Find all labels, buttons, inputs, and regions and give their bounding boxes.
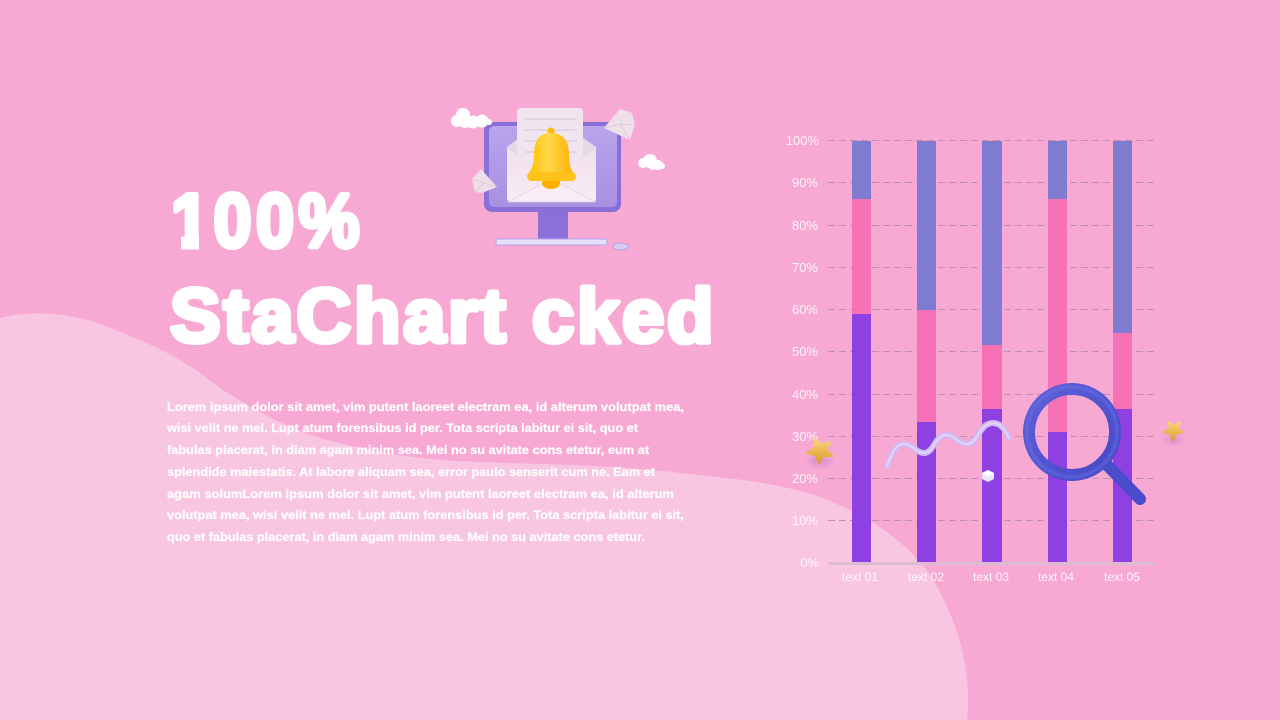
body paragraph: volutpat mea, wisi velit ne mel. Lupt atum forensibus id per. Tota scripta labitur ei sit, [167,508,684,522]
envelope back [507,115,596,182]
icon: monitor with envelope and bell [451,108,665,250]
small envelope right [604,109,635,140]
body paragraph: agam solumLorem ipsum dolor sit amet, vim putent laoreet electram ea, id alterum [167,487,674,501]
title [170,180,716,359]
bell [527,128,576,189]
y axis labels: 40% [792,387,818,402]
body paragraph: splendide maiestatis. At labore aliquam sea, error paulo senserit cum ne. Eam et [167,465,655,479]
y axis labels: 70% [792,260,818,275]
bar: text 03 [982,141,1002,563]
decorative light pink blob [0,313,968,720]
body paragraph: fabulas placerat, in diam agam minim sea. Mei no su avitate cons etetur, eum at [167,443,649,457]
icon: small cube [982,470,994,482]
bar: text 02 [917,141,936,563]
keyboard [496,239,607,245]
x axis labels: text 05 [1104,570,1140,584]
title: 100% [171,180,364,264]
y axis labels: 90% [792,175,818,190]
y axis labels: 80% [792,218,818,233]
mouse [613,243,628,250]
monitor stand [538,210,568,240]
icon: star right [1163,422,1183,444]
y axis labels: 20% [792,471,818,486]
envelope pocket [507,147,596,202]
x axis labels: text 04 [1038,570,1074,584]
cloud right [638,154,665,170]
body paragraph: Lorem ipsum dolor sit amet, vim putent laoreet electram ea, id alterum volutpat mea, [167,400,684,414]
bar: text 01 [852,141,871,563]
document [517,108,583,180]
body paragraph: wisi velit ne mel. Lupt atum forensibus id per. Tota scripta labitur ei sit, quo et [166,421,638,435]
grid lines [828,140,1156,520]
x axis labels: text 02 [908,570,944,584]
y axis labels: 10% [792,513,818,528]
y axis labels: 60% [792,302,818,317]
icon: magnifying glass [1027,387,1140,499]
x axis labels [842,570,1140,584]
x axis line [828,562,1156,565]
y axis labels [786,133,819,570]
x axis labels: text 01 [842,570,878,584]
monitor body [484,122,621,212]
cloud left [451,108,492,128]
stacked bar chart [786,133,1156,584]
y axis labels: 50% [792,344,818,359]
icon: star left [807,439,832,466]
y axis labels: 30% [792,429,818,444]
body paragraph: quo et fabulas placerat, in diam agam minim sea. Mei no su avitate cons etetur. [167,530,645,544]
y axis labels: 0% [800,555,819,570]
x axis labels: text 03 [973,570,1009,584]
y axis labels: 100% [786,133,819,148]
small envelope left [472,169,497,193]
body paragraph [166,400,684,544]
bar: text 05 [1113,141,1132,563]
icon: squiggle [887,423,1009,466]
title: StaChart cked [170,274,716,359]
bar: text 04 [1048,141,1067,563]
